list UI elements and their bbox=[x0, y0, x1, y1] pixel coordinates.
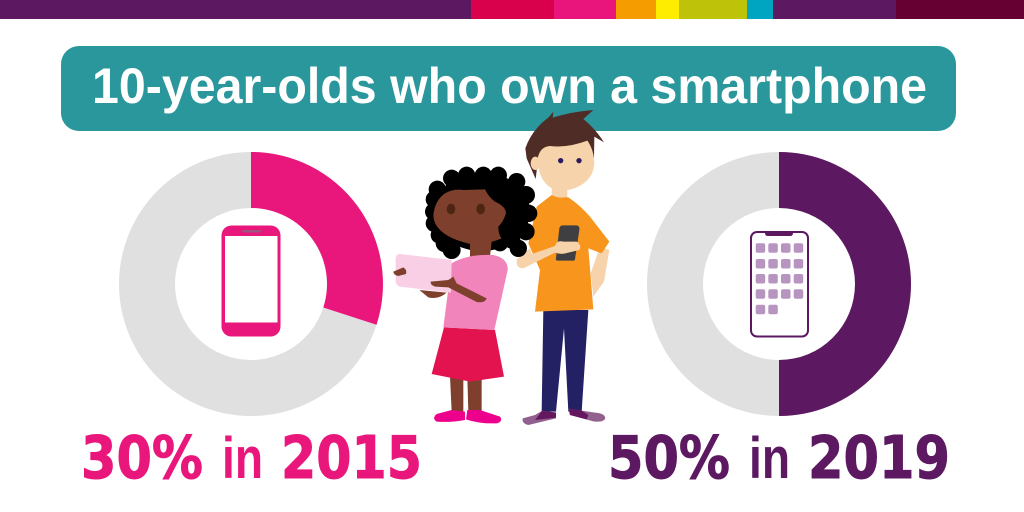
title banner bbox=[61, 46, 956, 131]
boy neck bbox=[552, 187, 567, 198]
label: 30% in 2015: 2015 bbox=[281, 423, 422, 492]
boy phone bbox=[556, 225, 579, 261]
donut chart: 30% in 2015 bbox=[147, 152, 383, 388]
girl hand left bbox=[393, 267, 406, 276]
boy shoes bbox=[523, 409, 605, 425]
girl shoes bbox=[434, 410, 501, 423]
top colour bar bbox=[0, 0, 1024, 19]
label: 30% in 2015 bbox=[81, 423, 422, 492]
illustration: girl with tablet bbox=[393, 167, 537, 423]
girl far hand bbox=[419, 290, 447, 298]
tablet bbox=[396, 254, 452, 293]
boy ear bbox=[531, 157, 540, 170]
boy eyes bbox=[558, 158, 563, 163]
girl skirt bbox=[432, 327, 504, 382]
label: 50% in 2019: in bbox=[749, 426, 790, 491]
label: 50% in 2019 bbox=[608, 423, 950, 492]
girl hair bbox=[425, 167, 537, 259]
label: 30% in 2015: in bbox=[222, 426, 263, 491]
icon: smartphone pink bbox=[222, 226, 280, 336]
girl neck bbox=[470, 242, 492, 257]
boy hair bbox=[525, 110, 604, 179]
label: 50% in 2019: 50% bbox=[608, 423, 730, 492]
boy far arm bbox=[591, 247, 609, 297]
girl near arm bbox=[431, 277, 487, 302]
label: 30% in 2015: 30% bbox=[81, 423, 203, 492]
title text: 10-year-olds who own a smartphone bbox=[92, 58, 927, 114]
girl torso bbox=[443, 255, 508, 330]
donut chart: 50% in 2019 bbox=[675, 152, 911, 416]
label: 50% in 2019: 2019 bbox=[808, 423, 950, 492]
girl legs bbox=[450, 377, 482, 412]
boy near arm bbox=[517, 241, 580, 268]
girl head bbox=[433, 189, 506, 245]
boy legs bbox=[542, 310, 588, 412]
boy torso bbox=[528, 195, 609, 312]
illustration: boy with phone bbox=[517, 110, 609, 425]
icon: smartphone with apps bbox=[751, 232, 808, 336]
boy face bbox=[538, 141, 594, 190]
girl eyes bbox=[447, 204, 455, 214]
